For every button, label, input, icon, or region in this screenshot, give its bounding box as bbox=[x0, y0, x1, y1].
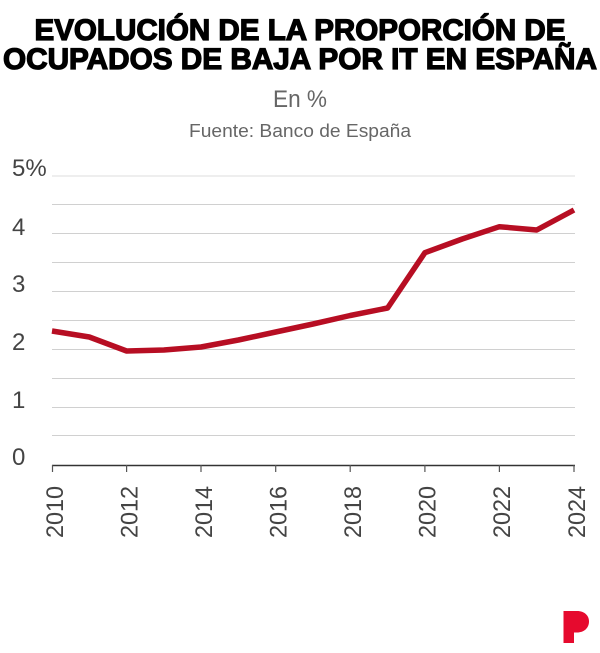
title: OCUPADOS DE BAJA POR IT EN ESPAÑA bbox=[3, 42, 597, 76]
x axis labels: 2020 bbox=[414, 486, 442, 538]
x axis labels: 2010 bbox=[42, 486, 69, 538]
subtitle: En % bbox=[273, 86, 327, 113]
title bbox=[3, 13, 597, 76]
y axis labels bbox=[12, 155, 47, 471]
x axis labels: 2022 bbox=[489, 486, 516, 538]
y axis labels: 4 bbox=[12, 214, 25, 241]
x axis bbox=[52, 465, 575, 472]
x axis labels: 2024 bbox=[564, 486, 591, 538]
line chart bbox=[12, 155, 591, 538]
y axis labels: 1 bbox=[12, 387, 25, 414]
source: Fuente: Banco de España bbox=[189, 121, 412, 141]
x axis labels: 2012 bbox=[116, 486, 144, 538]
y axis labels: 2 bbox=[12, 329, 25, 356]
x axis labels: 2018 bbox=[340, 486, 367, 538]
title: EVOLUCIÓN DE LA PROPORCIÓN DE bbox=[34, 13, 566, 47]
x axis labels: 2016 bbox=[266, 486, 292, 538]
y axis labels: 3 bbox=[12, 271, 25, 298]
logo bbox=[564, 611, 589, 643]
x axis labels bbox=[42, 486, 591, 538]
data line bbox=[52, 210, 574, 351]
y axis labels: 0 bbox=[12, 444, 25, 471]
y axis labels: 5% bbox=[12, 155, 47, 182]
x axis labels: 2014 bbox=[191, 486, 218, 538]
